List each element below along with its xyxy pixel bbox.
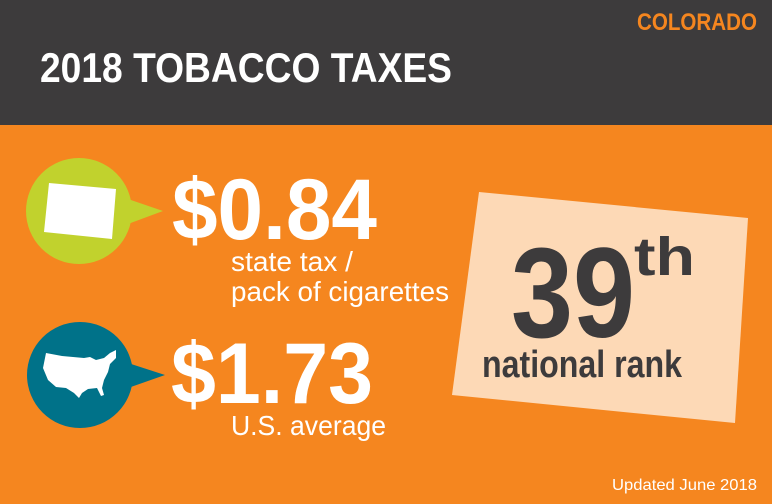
rank number: 39 — [511, 222, 635, 365]
panel: national rank: th — [634, 227, 695, 287]
title: 2018 TOBACCO TAXES — [40, 44, 452, 91]
US average value: U.S. average — [231, 410, 386, 441]
state tax value — [172, 162, 449, 307]
rank label: national rank — [482, 344, 683, 386]
footer note: Updated June 2018 — [612, 477, 757, 494]
state tax value: state tax / — [231, 246, 353, 277]
state tax value: pack of cigarettes — [231, 276, 449, 307]
icon: US map speech bubble — [27, 322, 165, 428]
US average value: $1.73 — [171, 326, 373, 422]
state tax value: $0.84 — [172, 162, 377, 258]
icon: Colorado speech bubble — [26, 158, 163, 264]
panel: national rank — [452, 192, 748, 423]
header bar — [0, 0, 772, 125]
